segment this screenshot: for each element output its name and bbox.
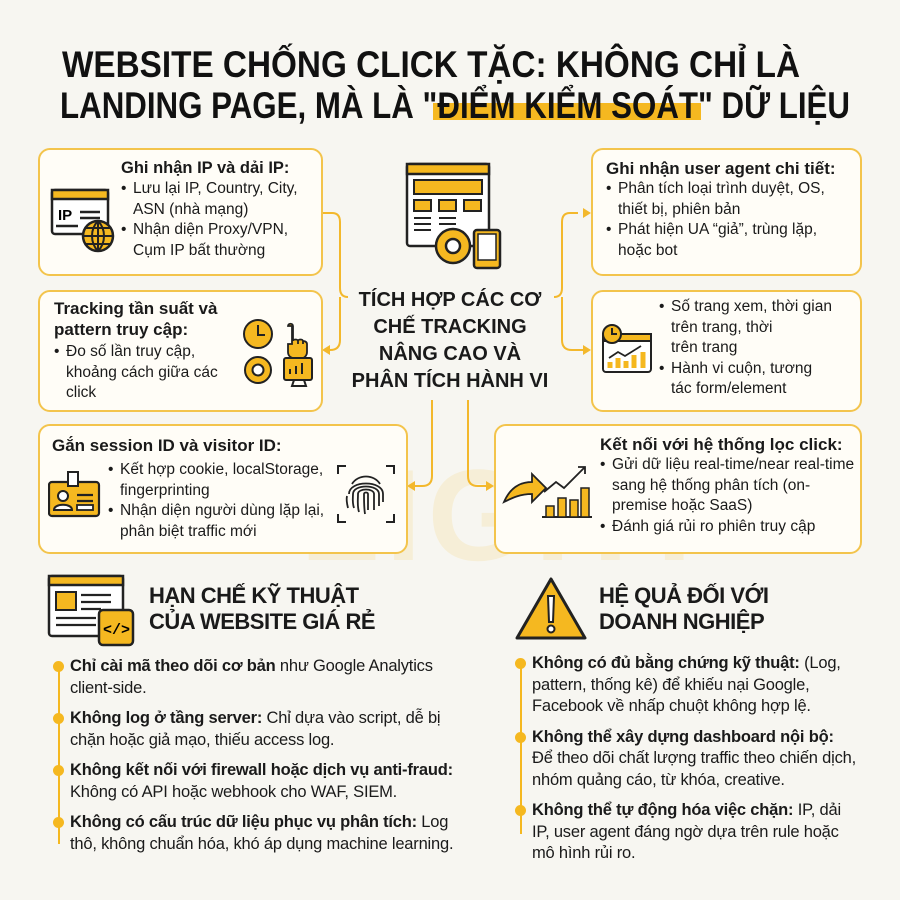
- panel: IP: Nhận diện Proxy/VPN, Cụm IP bất thường: [133, 221, 288, 258]
- list: limitations: Không kết nối với firewall hoặc dịch vụ anti-fraud: Không có API hoặc webhook cho WAF, SIEM.: [70, 761, 453, 800]
- panel: user agent: Phát hiện UA “giả”, trùng lặp, hoặc bot: [618, 221, 817, 258]
- panel: behavior: Hành vi cuộn, tương tác form/element: [671, 360, 812, 397]
- panel: click filter: Gửi dữ liệu real-time/near real-time sang hệ thống phân tích (on-premise hoặc SaaS): [612, 456, 854, 514]
- panel: tracking frequency: [38, 290, 323, 412]
- icon: code window: [48, 574, 134, 646]
- title: WEBSITE CHỐNG CLICK TẶC: KHÔNG CHỈ LÀ: [62, 43, 800, 85]
- panel: behavior: [591, 290, 862, 412]
- panel: IP: Ghi nhận IP và dải IP:: [121, 159, 289, 177]
- icon: warning: [516, 577, 587, 640]
- heading: limitations: HẠN CHẾ KỸ THUẬT: [149, 583, 359, 608]
- list: limitations: [53, 657, 453, 852]
- icon: IP globe: [50, 188, 114, 252]
- panel: session ID: [38, 424, 408, 554]
- watermark: LIGHT: [300, 442, 720, 588]
- list: limitations: Không có cấu trúc dữ liệu phục vụ phân tích: Log thô, không chuẩn hóa, khó áp dụng machine learning.: [70, 813, 453, 852]
- center title: PHÂN TÍCH HÀNH VI: [352, 370, 548, 392]
- panel: IP: [38, 148, 323, 276]
- icon: IP globe: IP: [58, 207, 72, 224]
- center title: CHẾ TRACKING: [373, 316, 527, 338]
- panel: session ID: Gắn session ID và visitor ID:: [52, 436, 282, 455]
- panel: behavior: Số trang xem, thời gian trên trang, thời: [671, 298, 832, 336]
- panel: click filter: [494, 424, 862, 554]
- panel: click filter: Kết nối với hệ thống lọc click:: [600, 435, 843, 454]
- icon: id card: [48, 471, 100, 518]
- panel: behavior: trên trang: [671, 339, 737, 356]
- heading: limitations: CỦA WEBSITE GIÁ RẺ: [149, 609, 375, 634]
- panel: tracking frequency: Tracking tần suất và pattern truy cập:: [54, 299, 217, 339]
- center title: TÍCH HỢP CÁC CƠ: [359, 289, 541, 311]
- panel: user agent: Ghi nhận user agent chi tiết:: [606, 159, 836, 178]
- title: [60, 43, 850, 126]
- icon: analytics window: [602, 324, 652, 373]
- list: consequences: Không thể tự động hóa việc chặn: IP, dải IP, user agent đáng ngờ dựa trên rule hoặc mô hình rủi ro.: [532, 801, 841, 862]
- heading: consequences: [599, 583, 768, 634]
- list: limitations: Chỉ cài mã theo dõi cơ bản như Google Analytics client-side.: [70, 657, 433, 696]
- icons: clock, tap, chrome, monitor: [243, 319, 313, 387]
- list: consequences: Không có đủ bằng chứng kỹ thuật: (Log, pattern, thống kê) để khiếu nại Google, Facebook về nhấp chuột không hợp lệ.: [532, 654, 841, 715]
- center icon: browser with chrome and phone: [406, 162, 502, 270]
- center title: NÂNG CAO VÀ: [379, 343, 521, 365]
- icon: code window: </>: [103, 622, 130, 639]
- panel: tracking frequency: Đo số lần truy cập, khoảng cách giữa các click: [66, 343, 218, 401]
- heading: limitations: [149, 583, 375, 634]
- panel: click filter: Đánh giá rủi ro phiên truy cập: [612, 518, 815, 534]
- icon: arrow and bars: [502, 466, 592, 518]
- list: limitations: Không log ở tầng server: Chỉ dựa vào script, dễ bị chặn hoặc giả mạo, thiếu access log.: [70, 709, 440, 748]
- list: consequences: Để theo dõi chất lượng traffic theo chiến dịch, nhóm quảng cáo, từ khóa, creative.: [532, 749, 856, 788]
- panel: session ID: Nhận diện người dùng lặp lại, phân biệt traffic mới: [120, 502, 324, 540]
- panel: user agent: [591, 148, 862, 276]
- center title: [352, 288, 548, 392]
- panel: user agent: Phân tích loại trình duyệt, OS, thiết bị, phiên bản: [618, 180, 825, 218]
- panel: session ID: Kết hợp cookie, localStorage, fingerprinting: [120, 461, 323, 498]
- icon: fingerprint: [337, 465, 395, 523]
- list: consequences: [515, 653, 856, 862]
- list: consequences: Không thể xây dựng dashboard nội bộ:: [532, 728, 834, 746]
- heading: consequences: HỆ QUẢ ĐỐI VỚI: [599, 583, 768, 608]
- panel: IP: Lưu lại IP, Country, City, ASN (nhà mạng): [133, 180, 298, 218]
- heading: consequences: DOANH NGHIỆP: [599, 609, 764, 634]
